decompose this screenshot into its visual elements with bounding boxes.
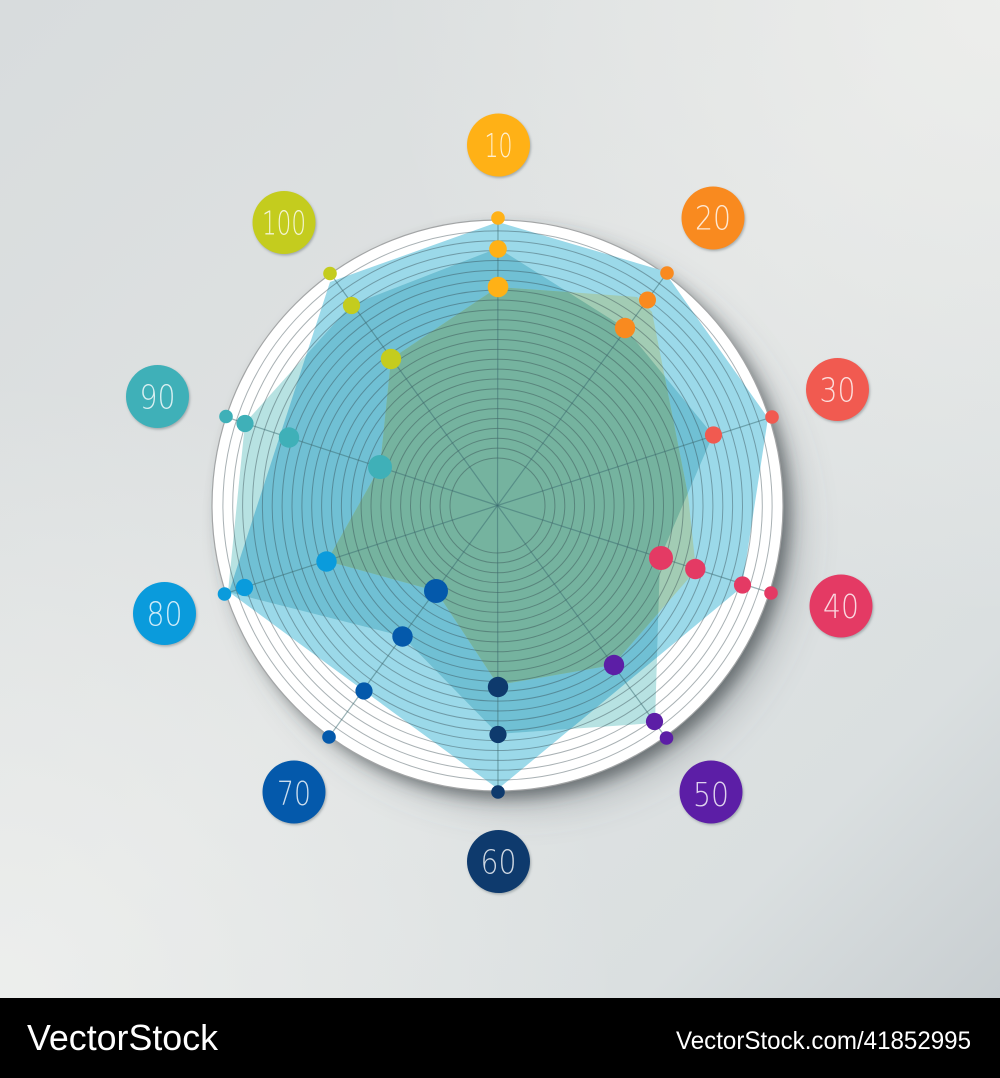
badge 100 — [252, 191, 316, 256]
white radar disc — [212, 220, 783, 791]
badge 70: 70 — [277, 774, 311, 813]
data points: axis 50 — [604, 655, 673, 745]
badge 80: 80 — [146, 594, 182, 634]
data points: axis 100 — [323, 267, 401, 369]
badge 10 — [467, 114, 531, 178]
badge 90: 90 — [140, 378, 176, 416]
footer logo text: VectorStock — [27, 1017, 219, 1058]
data points: axis 10 — [488, 211, 508, 297]
polygon: overlap of all series, dark green — [327, 287, 696, 685]
data points: axis 70 — [322, 579, 448, 744]
badge 60: 60 — [480, 842, 516, 882]
badge 90 — [126, 365, 190, 430]
badge 50 — [680, 760, 744, 825]
data points: axis 20 — [615, 266, 674, 338]
concentric grid rings — [223, 231, 772, 780]
badge 100: 100 — [262, 204, 306, 242]
disc shadow — [222, 230, 804, 812]
badge 20 — [682, 186, 746, 251]
polygon: series A sky blue — [229, 222, 768, 789]
badge 80 — [133, 582, 197, 646]
footer url text: VectorStock.com/41852995 — [676, 1027, 971, 1055]
data points: axis 60 — [488, 677, 508, 799]
data points: axis 90 — [219, 410, 392, 479]
radar polygons — [228, 222, 768, 789]
badge 40 — [810, 574, 874, 639]
polygon: overlap of A and B — [230, 252, 710, 734]
badge 20: 20 — [695, 198, 731, 238]
badge 10: 10 — [484, 126, 512, 165]
badge 40: 40 — [823, 587, 859, 626]
radial spokes — [224, 218, 772, 791]
polygon: series C pale green — [327, 287, 696, 685]
data points: axis 40 — [649, 546, 778, 600]
badge 70 — [262, 760, 326, 825]
data points: axis 30 — [705, 410, 779, 444]
footer band — [0, 998, 1000, 1078]
badge 50: 50 — [693, 775, 729, 814]
badge 60 — [467, 830, 531, 894]
data points: axis 80 — [218, 551, 337, 601]
badge 30: 30 — [820, 370, 856, 410]
polygon: series B pale teal — [228, 248, 713, 734]
badge 30 — [806, 358, 870, 422]
